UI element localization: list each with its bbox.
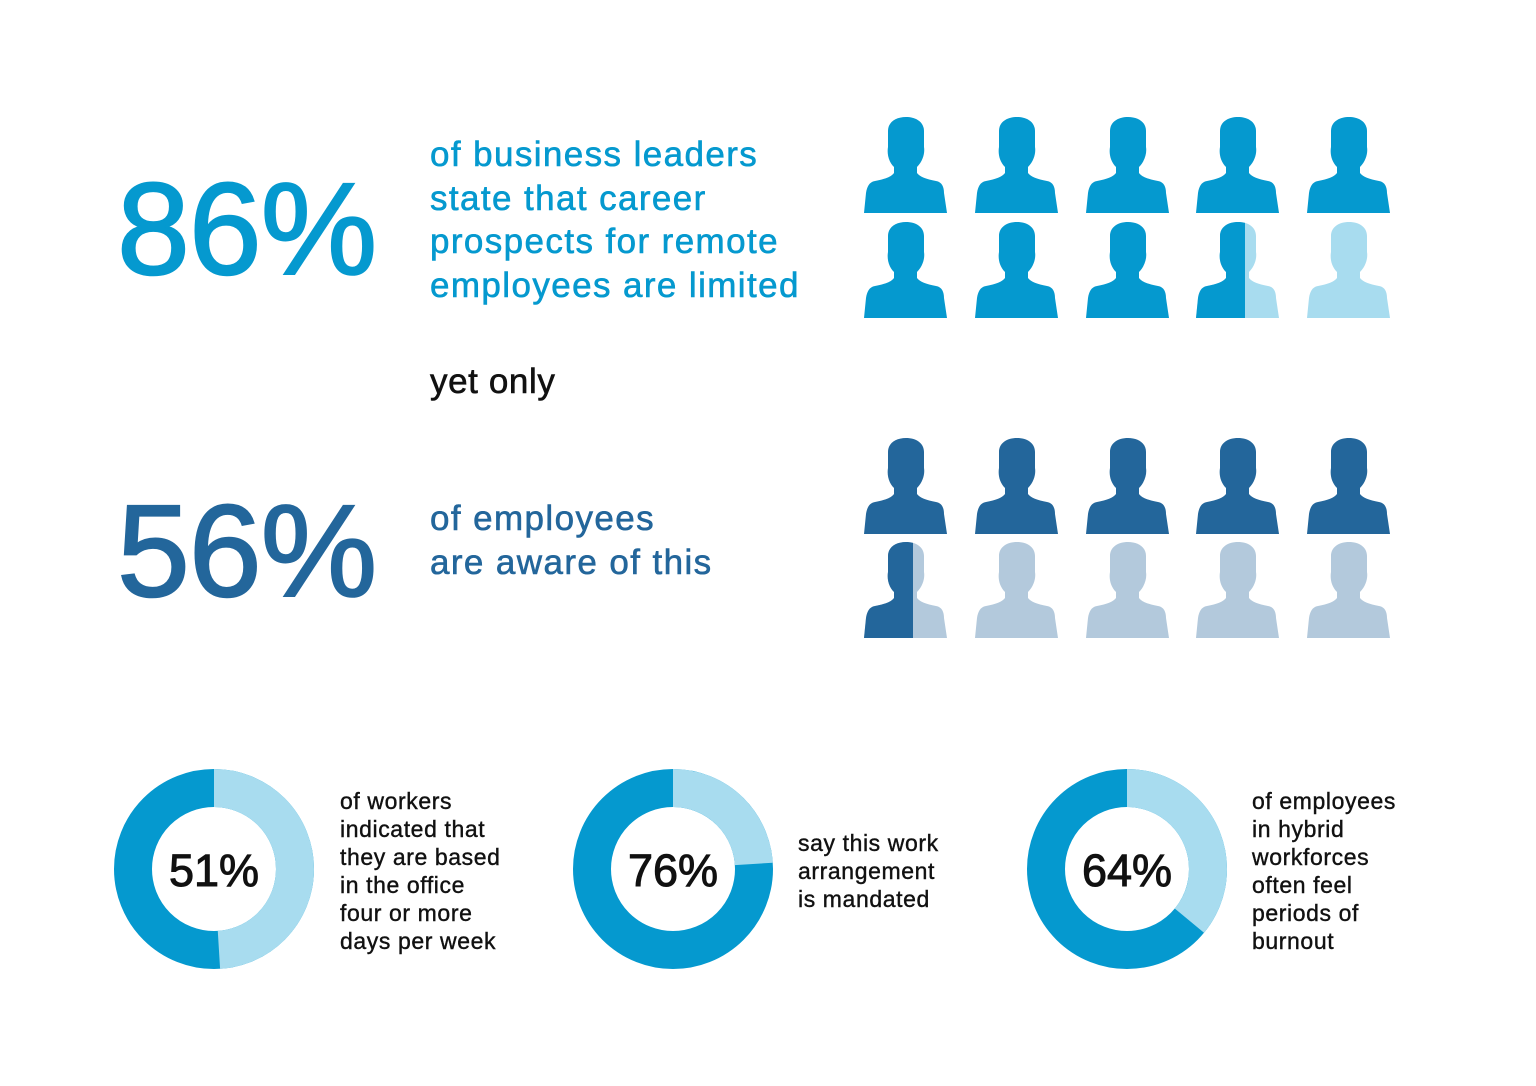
text: employees aware: are aware of this	[430, 542, 713, 582]
text: 64%: of employees	[1252, 788, 1396, 814]
icon grid: 56%	[864, 438, 1390, 638]
text: 51%: in the office	[340, 872, 465, 898]
text: 64%: periods of	[1252, 900, 1359, 926]
text: 76%: say this work	[798, 830, 939, 856]
donut: 76%	[573, 769, 773, 969]
text: 76%: arrangement	[798, 858, 935, 884]
text: 51%: days per week	[340, 928, 496, 954]
text: 76%	[798, 830, 939, 912]
donut: 64%: 64%	[1082, 845, 1172, 896]
donut: 51%: 51%	[169, 845, 259, 896]
donut: 51%	[114, 769, 314, 969]
donut: 76%: 76%	[628, 845, 718, 896]
icon grid: 86%	[864, 117, 1390, 318]
text: 64%: often feel	[1252, 872, 1353, 898]
text: 64%: workforces	[1252, 844, 1369, 870]
text: business leaders: state that career	[430, 178, 707, 218]
text: 64%: burnout	[1252, 928, 1334, 954]
text: 51%: four or more	[340, 900, 472, 926]
text: 51%: they are based	[340, 844, 501, 870]
stat: 86%: 86%	[117, 155, 376, 302]
donut: 64%	[1027, 769, 1227, 969]
text: yet only: yet only	[430, 362, 555, 401]
text: business leaders: prospects for remote	[430, 222, 779, 261]
text: 51%	[340, 788, 501, 954]
text: employees aware	[430, 499, 713, 582]
text: 64%: in hybrid	[1252, 816, 1344, 842]
text: business leaders: employees are limited	[430, 266, 800, 304]
text: employees aware: of employees	[430, 499, 655, 538]
text: business leaders: of business leaders	[430, 135, 758, 174]
text: 64%	[1252, 788, 1396, 954]
text: 51%: of workers	[340, 788, 452, 814]
text: 51%: indicated that	[340, 816, 485, 842]
text: business leaders	[430, 135, 800, 305]
stat: 56%: 56%	[117, 477, 376, 624]
text: 76%: is mandated	[798, 886, 930, 912]
